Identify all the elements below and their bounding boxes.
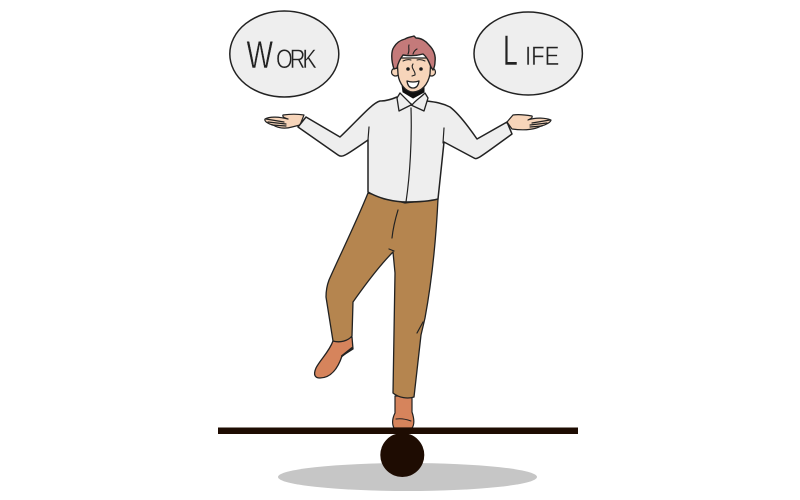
- bubble: work: [230, 11, 339, 97]
- standing shoe: [393, 396, 414, 428]
- bubble: work: W: [246, 34, 273, 77]
- hair strands: [408, 45, 417, 54]
- trousers: [326, 193, 438, 398]
- left shoe: [315, 337, 353, 378]
- right hand: [507, 115, 551, 130]
- balance beam: [218, 428, 578, 434]
- left hand: [265, 114, 304, 128]
- collar: [397, 93, 428, 111]
- face: [397, 58, 431, 92]
- bubble: life: [474, 12, 582, 95]
- ears: [392, 68, 436, 76]
- ground shadow: [278, 463, 537, 491]
- shirt: [298, 93, 512, 202]
- bubble: life: IFE: [525, 42, 559, 72]
- bubble: work: ORK: [276, 45, 317, 75]
- ball: [380, 433, 424, 477]
- person: [265, 36, 551, 428]
- smile: [407, 81, 419, 88]
- eyes, brows and nose: [403, 60, 425, 76]
- bubble: life: L: [503, 27, 518, 75]
- hair: [392, 36, 435, 70]
- neck and black collar shadow: [402, 85, 424, 98]
